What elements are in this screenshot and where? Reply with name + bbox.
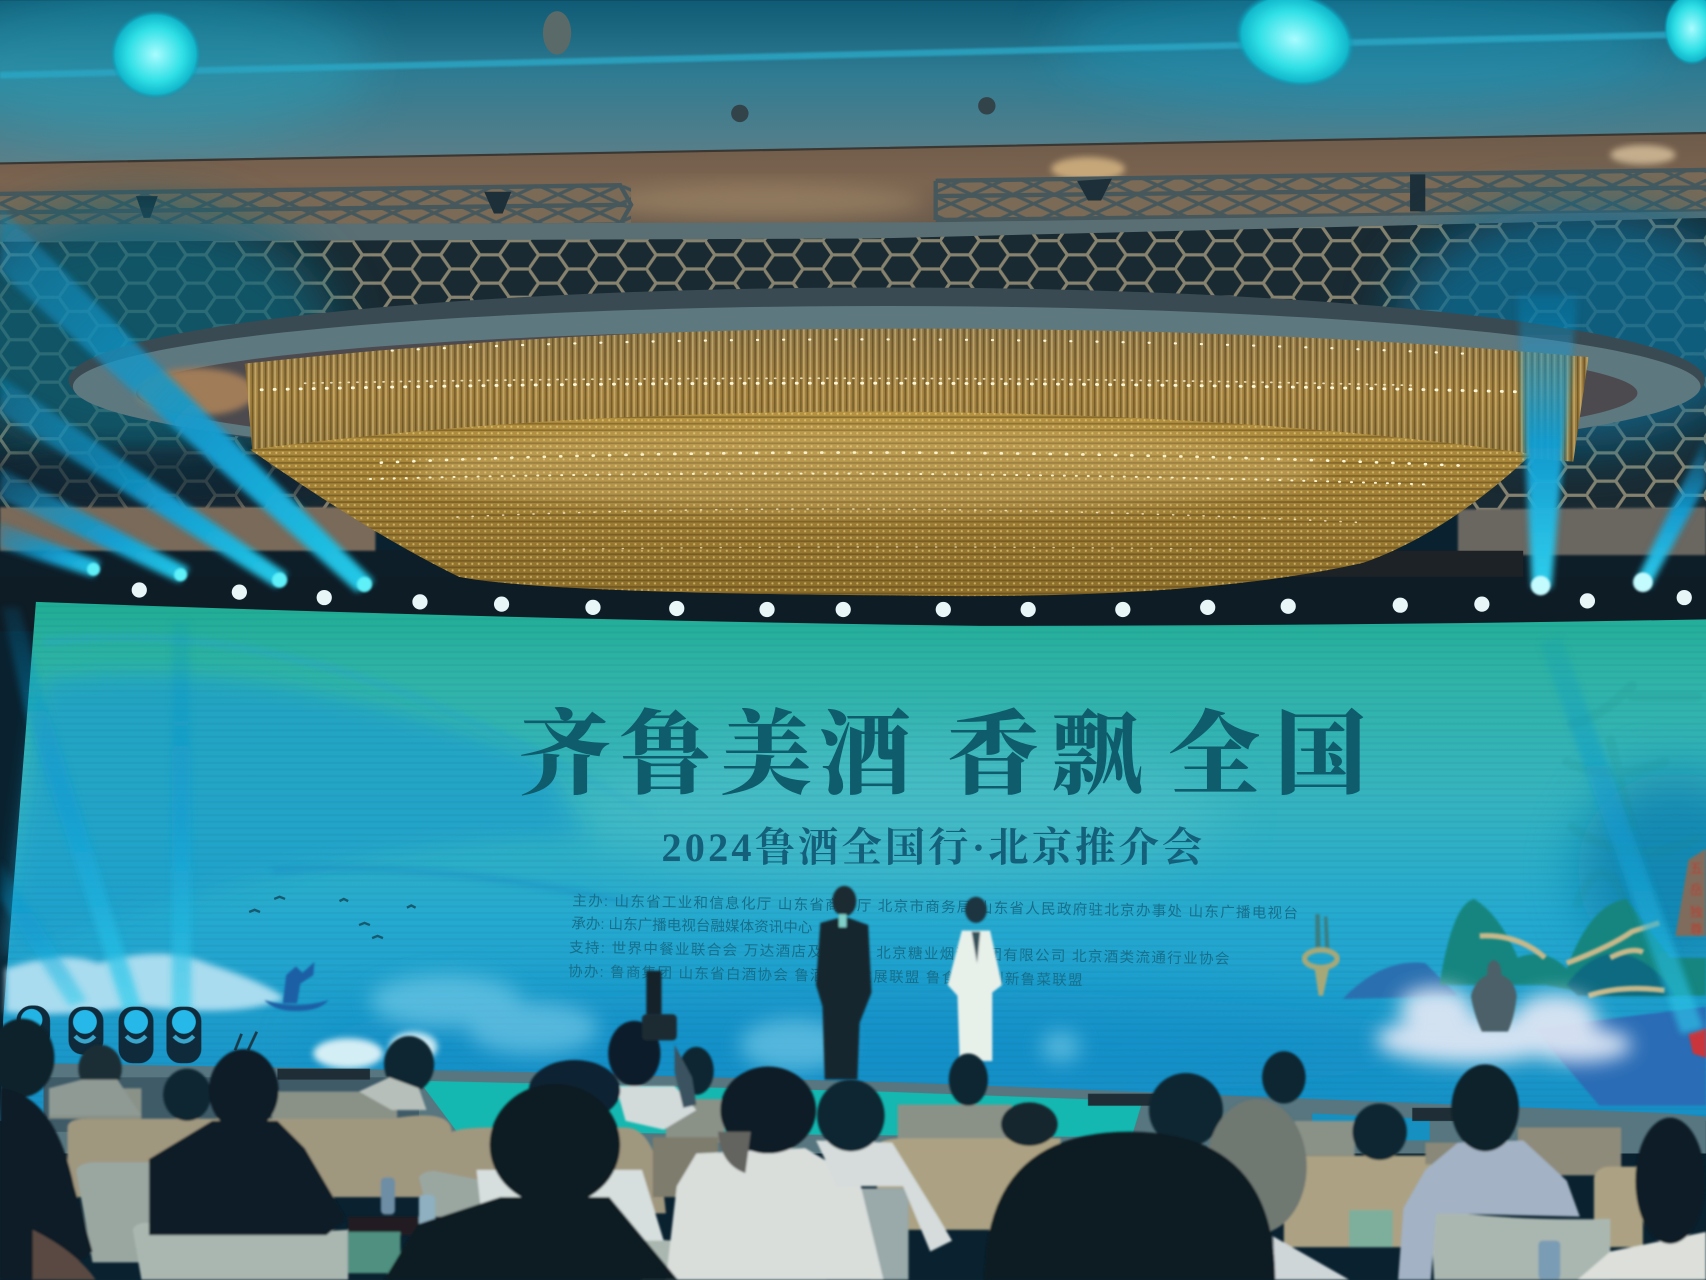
organiser credits (568, 892, 1298, 989)
lower blue hill (1534, 1007, 1706, 1106)
screen lower deep blue (305, 990, 1436, 1099)
audience (0, 971, 1706, 1280)
icon: microphones (235, 1032, 257, 1050)
mid row person behind centre (477, 1060, 664, 1241)
man in blue shirt (1398, 1064, 1580, 1280)
beam 5 (1518, 294, 1578, 588)
title: 齐鲁美酒香飘全国 (519, 705, 1367, 806)
light 4 (166, 1007, 201, 1063)
icon: ceiling spotlight right (1664, 0, 1706, 66)
green peaks (1439, 899, 1706, 996)
foreground left person (0, 1019, 96, 1280)
beam 7 (172, 620, 191, 1012)
beam 2 (0, 376, 287, 588)
screen left blue swoosh (5, 675, 588, 958)
painted mountains right (1343, 849, 1706, 1106)
engraved rock with banner: 五 (1690, 861, 1703, 876)
lower ceiling band (0, 507, 1706, 631)
engraved rock with banner: 独 (1690, 904, 1703, 919)
icon: security cameras (543, 11, 996, 122)
seated people back row (78, 1036, 1407, 1160)
chandelier bowl texture (250, 412, 1532, 596)
hexagonal ceiling panel (0, 207, 1706, 512)
credits line 4: 协办: 鲁商集团 山东省白酒协会 鲁酒产业发展联盟 鲁食鲁菜创新鲁菜联盟 (568, 963, 1083, 989)
credits line 3: 支持: 世界中餐业联合会 万达酒店及度假村 北京糖业烟酒集团有限公司 北京酒类流通行业协会 (569, 939, 1230, 968)
clouds right (1376, 987, 1632, 1063)
back row chair covers (49, 1088, 1621, 1175)
icon: ceiling spotlight left (110, 10, 201, 99)
light beams (0, 207, 1706, 1034)
man in black polo (149, 1049, 346, 1235)
lighting truss right (936, 170, 1706, 220)
photographer (608, 971, 696, 1130)
screen right dark blue (1578, 773, 1706, 969)
lighting truss left (0, 185, 631, 232)
gold cloud swirls (1480, 923, 1665, 996)
chandelier crystal strands (245, 329, 1588, 462)
faint calligraphy on screen right (1567, 686, 1697, 958)
engraved rock with banner (1676, 849, 1706, 1058)
beam 3 (0, 468, 189, 582)
light 3 (119, 1007, 153, 1063)
screen centre glow (577, 735, 1229, 887)
ring around chandelier (69, 287, 1705, 472)
blue mountain (1343, 963, 1458, 999)
tables and bottles (348, 1177, 1560, 1280)
clouds left (5, 954, 437, 1069)
icon: ceiling spotlight centre (1224, 0, 1366, 100)
ceiling upper panel (0, 0, 1706, 163)
beam 8 (2, 607, 141, 1012)
chandelier glow (413, 425, 1327, 512)
icon: sculpture on screen (1305, 914, 1337, 996)
screen scanlines (0, 602, 1706, 1121)
foreground centre man (384, 1084, 678, 1280)
credits line 1: 主办: 山东省工业和信息化厅 山东省商务厅 北京市商务局 山东省人民政府驻北京办事处 山东广播电视台 (572, 892, 1298, 922)
host: woman in white suit (948, 897, 1002, 1061)
white chairs (76, 1162, 1610, 1280)
stage moving lights (16, 1006, 201, 1063)
man with glasses in white shirt (666, 1066, 883, 1280)
icon: Confucius figure on screen (1471, 960, 1517, 1032)
beam heads (87, 563, 1653, 595)
icon: boat and fisherman (264, 962, 329, 1011)
man at right of centre (816, 1080, 952, 1251)
chandelier crystal bowl (250, 412, 1532, 596)
stage edge and floor (44, 1063, 1706, 1154)
foreground large head (985, 1132, 1275, 1280)
screen dark swoosh (272, 868, 631, 903)
ceiling cove (0, 133, 1706, 231)
chandelier sparkles (261, 339, 1523, 550)
screen lighter swoosh (44, 637, 653, 816)
light 1 (16, 1006, 50, 1049)
engraved rock with banner: 岳 (1690, 883, 1703, 898)
beam 9 (0, 860, 87, 1007)
light 2 (69, 1007, 103, 1055)
chandelier (245, 329, 1588, 596)
beam 6 (1635, 435, 1706, 588)
beam 10 (1540, 637, 1704, 1034)
foreground right man (1578, 1118, 1706, 1280)
beam 4 (0, 522, 100, 577)
icon: birds (249, 897, 416, 938)
clouds centre (370, 975, 1080, 1071)
beige sofas (67, 1115, 1643, 1247)
LED fixture strip (0, 577, 1706, 631)
engraved rock with banner: 尊 (1690, 922, 1703, 937)
credits line 2: 承办: 山东广播电视台融媒体资讯中心 (571, 915, 813, 937)
grey-haired man (1207, 1099, 1349, 1280)
LED screen (0, 602, 1706, 1121)
back row shirts (49, 1077, 427, 1115)
chandelier upper cylinder (245, 329, 1588, 462)
beam 1 (0, 207, 374, 592)
subtitle: 2024鲁酒全国行·北京推介会 (662, 825, 1202, 870)
host: man in dark suit (816, 886, 871, 1080)
